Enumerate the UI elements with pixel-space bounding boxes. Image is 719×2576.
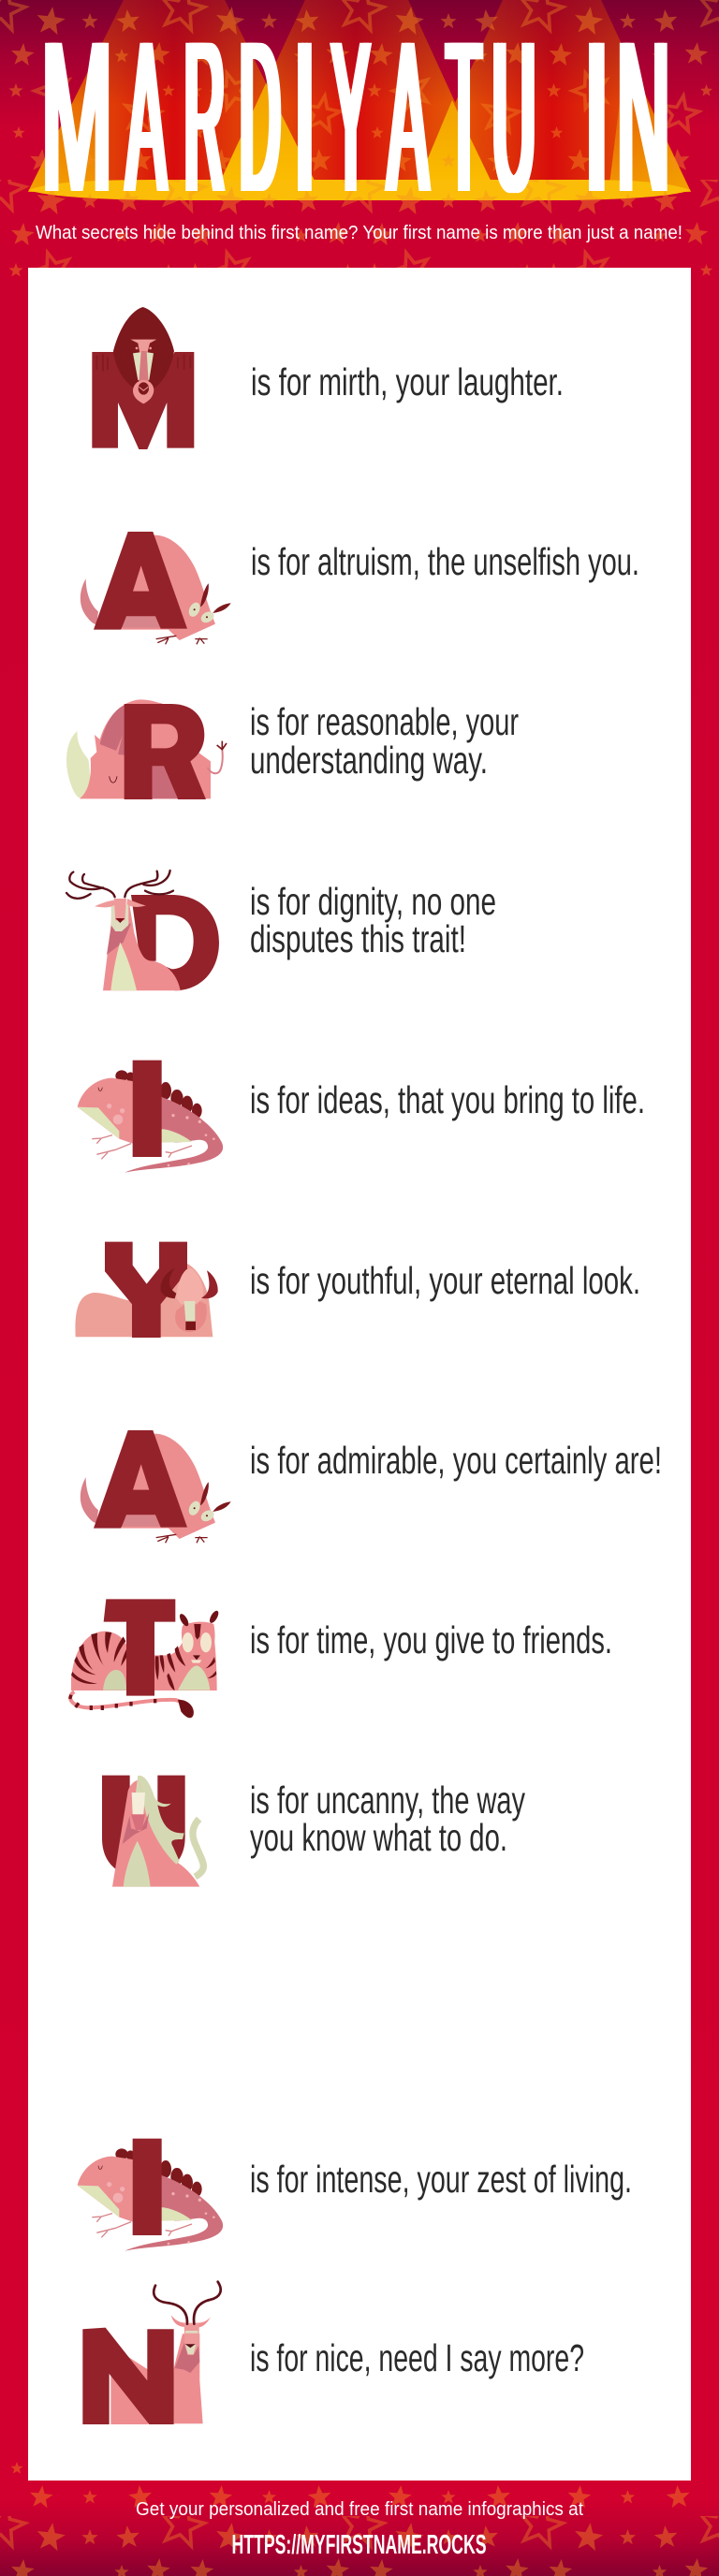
row: Y	[75, 1242, 640, 1338]
title: N	[617, 0, 670, 237]
icon: Y yak	[75, 1242, 218, 1338]
icon: A armadillo	[81, 1430, 231, 1543]
row: U	[102, 1776, 525, 1887]
title: A	[126, 0, 166, 237]
title: A	[388, 0, 428, 237]
icon: I iguana	[78, 1061, 223, 1173]
row: R	[66, 699, 519, 799]
spotlights	[28, 0, 691, 200]
title: I	[296, 0, 314, 237]
tagline: What secrets hide behind this first name? Your first name is more than just a name!	[36, 223, 682, 243]
row: D: disputes this trait!	[250, 917, 466, 960]
row: A admirable	[81, 1430, 662, 1543]
row: I ideas	[78, 1061, 645, 1173]
star pattern: top	[0, 0, 719, 281]
title: T	[447, 0, 481, 237]
title: I	[585, 0, 609, 237]
white content panel	[28, 268, 691, 2481]
icon: N gazelle	[82, 2282, 221, 2424]
icon: T tiger	[70, 1599, 220, 1718]
icon: U unicorn	[102, 1776, 203, 1887]
icon: M baboon	[92, 307, 194, 449]
footer line: Get your personalized and free first name infographics at	[136, 2499, 583, 2520]
text: R lines: is for reasonable, your	[250, 700, 519, 743]
footer url: HTTPS://MYFIRSTNAME.ROCKS	[232, 2530, 487, 2560]
title: U	[492, 0, 536, 237]
row: A altruism	[81, 532, 639, 644]
title: R	[183, 0, 224, 237]
title	[41, 0, 670, 237]
star pattern: bottom	[0, 2481, 719, 2576]
text: M line: is for mirth, your laughter.	[251, 360, 564, 403]
text: U lines: is for uncanny, the way	[250, 1778, 525, 1822]
star in left margin	[10, 2462, 23, 2474]
icon: R rhino	[66, 699, 227, 799]
row: M	[92, 307, 564, 449]
row: I intense	[78, 2139, 632, 2251]
text: N line: is for nice, need I say more?	[250, 2336, 584, 2379]
title: M	[41, 0, 112, 237]
row: D	[66, 871, 496, 990]
row: R: understanding way.	[250, 739, 488, 782]
row: T	[70, 1599, 612, 1718]
title: Y	[331, 0, 370, 237]
icon: A armadillo	[81, 532, 231, 644]
row: U: you know what to do.	[250, 1816, 507, 1859]
icon: I iguana	[78, 2139, 223, 2251]
text: D lines: is for dignity, no one	[250, 880, 496, 923]
row: N	[82, 2282, 584, 2424]
icon: D deer	[66, 871, 219, 990]
title: D	[240, 0, 281, 237]
